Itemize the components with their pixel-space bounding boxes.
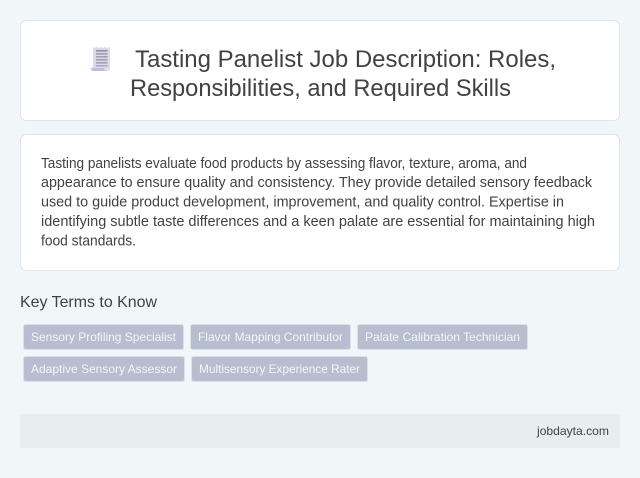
chip: Adaptive Sensory Assessor: Adaptive Sensory Assessor <box>31 362 177 376</box>
chip: Palate Calibration Technician: Palate Calibration Technician <box>365 330 520 344</box>
panel: description card <box>20 134 620 270</box>
chip: Flavor Mapping Contributor: Flavor Mapping Contributor <box>198 330 343 344</box>
description text: appearance to ensure quality and consistency. They provide detailed sensory feedback <box>41 175 593 191</box>
chip: Multisensory Experience Rater: Multisensory Experience Rater <box>199 362 360 376</box>
chip: Multisensory Experience Rater <box>192 356 368 382</box>
description text: Tasting panelists evaluate food products by assessing flavor, texture, aroma, and <box>41 156 527 172</box>
panel: title card <box>20 20 620 120</box>
description text: identifying subtle taste differences and a keen palate are essential for maintaining high <box>41 214 595 230</box>
chip: Adaptive Sensory Assessor <box>24 356 184 382</box>
footer bar <box>20 414 620 448</box>
chip: Sensory Profiling Specialist <box>24 324 184 350</box>
title: Tasting Panelist Job Description: Roles, <box>135 46 556 73</box>
chip: Flavor Mapping Contributor <box>190 324 350 350</box>
description text: used to guide product development, improvement, and quality control. Expertise in <box>41 194 564 210</box>
icon: document receipt <box>91 47 110 71</box>
title: Responsibilities, and Required Skills <box>130 75 511 102</box>
chip: Palate Calibration Technician <box>358 324 528 350</box>
heading: key terms: Key Terms to Know <box>20 294 157 311</box>
description text: food standards. <box>41 234 136 250</box>
chip: Sensory Profiling Specialist: Sensory Profiling Specialist <box>31 330 177 344</box>
key term chips <box>24 324 528 382</box>
title <box>130 46 556 102</box>
footer bar: jobdayta.com <box>536 424 609 438</box>
description text <box>41 156 595 250</box>
